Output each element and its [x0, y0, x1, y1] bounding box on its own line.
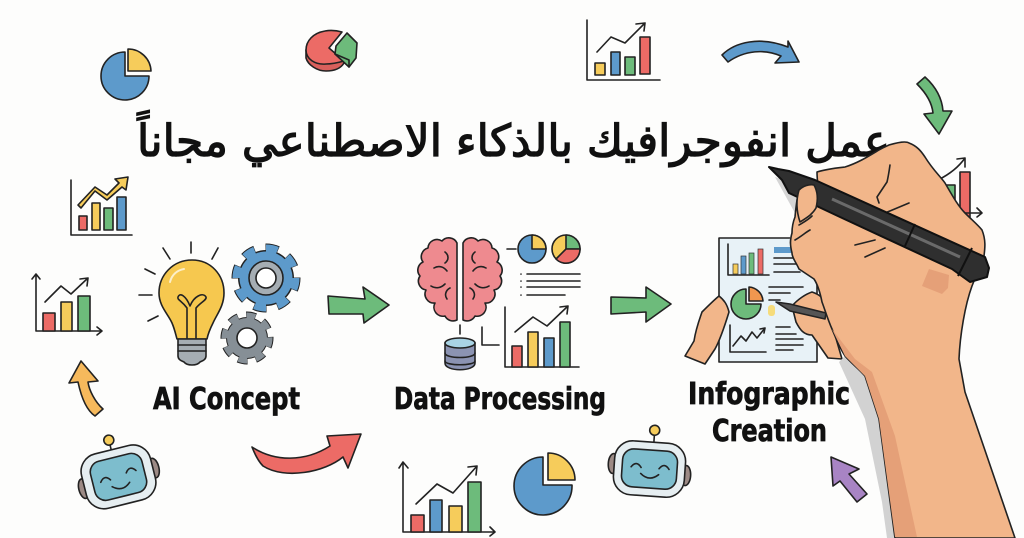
icon: 3D red and green pie — [306, 30, 357, 71]
icon: bar chart left upper — [71, 177, 132, 235]
label: Infographic: Infographic — [688, 377, 850, 412]
icon: brain — [418, 238, 502, 321]
arrow: green to data processing — [328, 287, 389, 323]
icon: marker pen — [769, 167, 989, 282]
icon: bar chart left lower — [32, 274, 102, 335]
icon: bar chart bottom center — [399, 462, 495, 536]
icon: robot right — [606, 422, 694, 499]
icon: database — [445, 338, 475, 370]
arrow: yellow up curved — [69, 361, 103, 416]
label: Data Processing: Data Processing — [394, 382, 606, 417]
icon: infographic document with hands — [685, 238, 842, 364]
text lines beside brain — [521, 274, 580, 295]
icon: blue and yellow pie bottom — [514, 453, 575, 515]
arrow: purple up left — [831, 457, 867, 502]
arrow: red curved — [252, 434, 361, 473]
arrow: green to infographic creation — [611, 287, 671, 322]
label: Creation: Creation — [712, 414, 827, 449]
icon: gray gear — [225, 316, 269, 360]
icon: blue and yellow pie top left — [101, 49, 151, 100]
icon: light bulb — [139, 242, 224, 365]
icon: two small pies — [518, 235, 580, 263]
icon: bar chart top center — [587, 20, 660, 80]
icon: blue gear — [237, 249, 295, 307]
icon: robot left — [68, 425, 166, 514]
hand drawing with marker — [769, 142, 1015, 538]
icon: bar chart beside brain — [505, 306, 579, 367]
icon: bar chart behind hand — [938, 158, 982, 217]
arrow: blue curved — [722, 41, 799, 63]
label: AI Concept: AI Concept — [153, 382, 300, 417]
arrow: green curved down — [917, 77, 952, 134]
connectors from brain — [460, 249, 516, 345]
title: عمل انفوجرافيك بالذكاء الاصطناعي مجاناً — [136, 109, 890, 167]
